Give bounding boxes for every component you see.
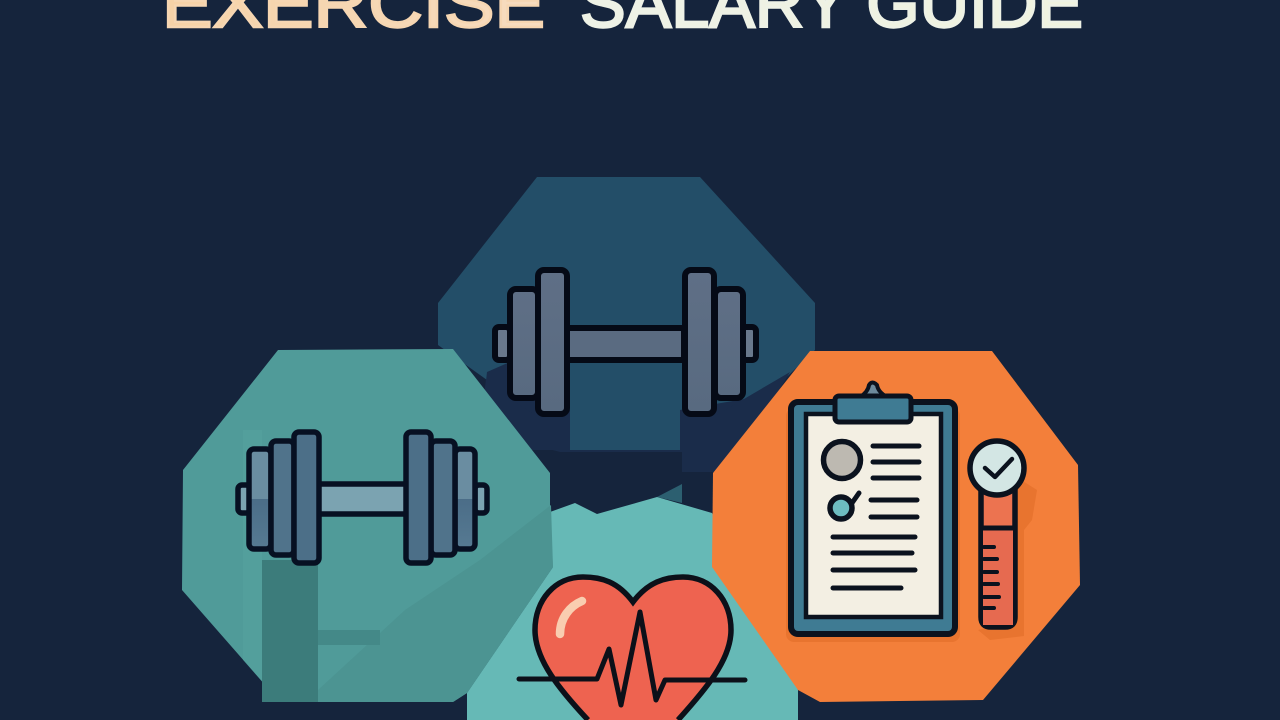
panel: clipboard octagon: [712, 351, 1080, 702]
icon: test tube gauge: [970, 441, 1024, 627]
panel: left dumbbell octagon: [182, 349, 553, 702]
icon: left dumbbell: [238, 432, 487, 563]
icon: clipboard: [791, 382, 955, 634]
title: [162, 0, 1083, 42]
panel: top dumbbell octagon: [438, 177, 815, 503]
icon: heart with pulse: [519, 577, 745, 720]
icon: top dumbbell: [495, 270, 756, 414]
panel: heart background shape: [467, 497, 798, 720]
